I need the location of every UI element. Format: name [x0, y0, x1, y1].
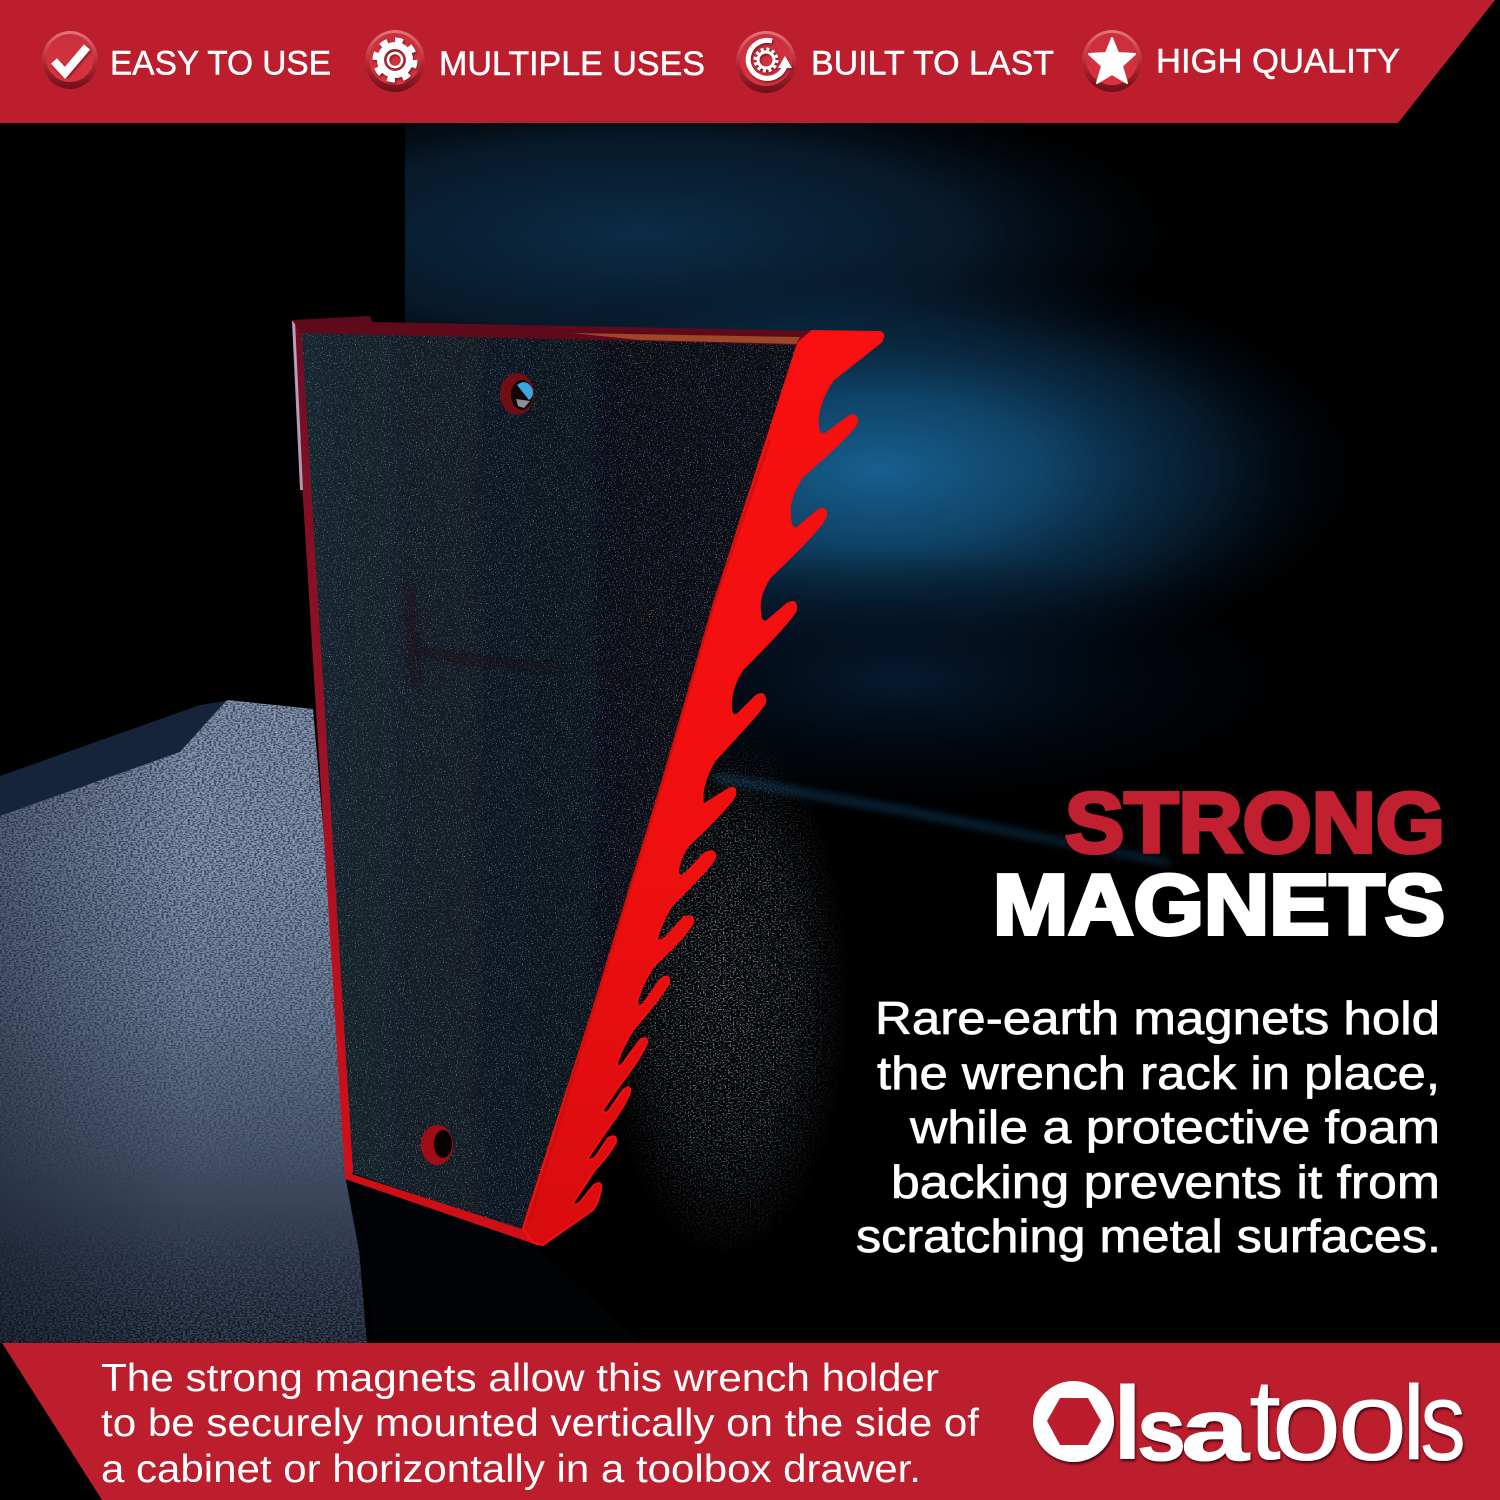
- label: multiple uses: MULTIPLE USES: [439, 45, 705, 83]
- text block: mounting description: to be securely mounted vertically on the side of: [101, 1402, 979, 1445]
- heading line: magnets: MAGNETS: [993, 858, 1445, 953]
- photo: dark fabric behind rack: [590, 710, 870, 1343]
- top mounting hole: [500, 373, 534, 415]
- logo wordmark: l: [1113, 1366, 1142, 1482]
- rack left edge: [292, 321, 353, 1178]
- rack left highlight: [292, 321, 303, 490]
- icon: check mark badge: [42, 31, 98, 89]
- logo wordmark: t: [1249, 1356, 1281, 1484]
- label: built to last: BUILT TO LAST: [811, 44, 1054, 82]
- rack top reflection: [572, 333, 800, 344]
- logo wordmark: o: [1338, 1359, 1408, 1484]
- rack top edge: [292, 316, 820, 345]
- heading: strong magnets: [993, 776, 1445, 953]
- heading line: strong: STRONG: [1065, 776, 1445, 871]
- logo wordmark: o: [1272, 1359, 1342, 1484]
- rack foam backing: [298, 330, 800, 1232]
- icon: gear badge: [365, 30, 425, 92]
- text block: magnet description: while a protective foam: [909, 1101, 1440, 1153]
- photo: blue fabric backdrop: [405, 123, 1500, 900]
- label: easy to use: EASY TO USE: [110, 44, 331, 82]
- feature: easy to use: [42, 31, 331, 89]
- panel: top feature banner: [0, 0, 1495, 123]
- text block: magnet description: scratching metal surfaces.: [856, 1210, 1441, 1262]
- text block: mounting description: [101, 1357, 979, 1491]
- photo: grey fabric surface: [0, 700, 367, 1343]
- rack bottom edge: [345, 1172, 540, 1246]
- text block: mounting description: The strong magnets allow this wrench holder: [101, 1357, 939, 1400]
- logo wordmark: [1113, 1356, 1466, 1484]
- feature: multiple uses: [365, 30, 705, 92]
- bottom mounting hole: [421, 1125, 453, 1165]
- logo wordmark: s: [1420, 1359, 1466, 1484]
- product: magnetic wrench rack: [292, 316, 883, 1246]
- logo wordmark: s: [1137, 1380, 1186, 1479]
- foam indentation marks: [408, 585, 560, 685]
- logo wordmark: l: [1402, 1364, 1426, 1482]
- feature: high quality: [1082, 30, 1400, 92]
- icon: gear and arrow badge: [736, 31, 796, 93]
- shadow under rack: [345, 1175, 640, 1343]
- icon: star badge: [1082, 30, 1142, 92]
- logo wordmark: a: [1181, 1380, 1250, 1479]
- logo: Olsatools: [1033, 1356, 1466, 1484]
- text block: mounting description: a cabinet or horizontally in a toolbox drawer.: [101, 1448, 921, 1491]
- rack toothed red side: [523, 331, 883, 1245]
- text block: magnet description: [856, 992, 1441, 1262]
- text block: magnet description: Rare-earth magnets hold: [875, 992, 1440, 1044]
- panel: bottom banner: [2, 1343, 1500, 1500]
- text block: magnet description: the wrench rack in place,: [877, 1047, 1440, 1099]
- label: high quality: HIGH QUALITY: [1156, 42, 1400, 80]
- logo letter O with hex socket: O: [1040, 1374, 1112, 1476]
- feature: built to last: [736, 31, 1054, 93]
- rack shaded fold: [530, 440, 770, 1220]
- text block: magnet description: backing prevents it from: [891, 1156, 1440, 1208]
